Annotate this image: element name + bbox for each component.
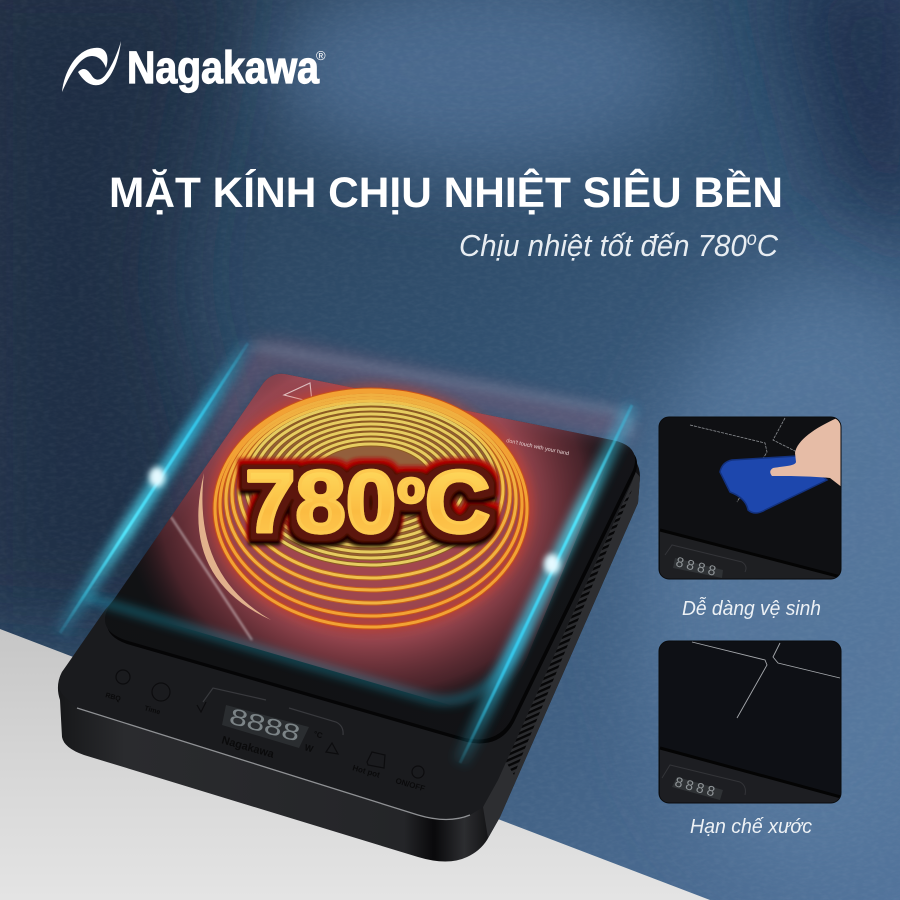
display outline: [662, 765, 745, 795]
button icons: [116, 670, 424, 778]
subtitle: Chịu nhiệt tốt đến 780: [459, 228, 762, 263]
button labels: RBQ: [104, 692, 122, 703]
button labels: Nagakawa: [220, 734, 276, 761]
heat haze frame above glass: [150, 338, 634, 545]
crescent light arc: [198, 473, 271, 620]
panel: scratch resistance photo: [659, 641, 841, 805]
panel outline: [203, 688, 343, 735]
caption: easy cleaning: Dễ dàng vệ sinh: [682, 597, 821, 620]
induction cooker: [58, 343, 640, 862]
side vent strip: [483, 470, 640, 838]
button labels: Hot pot: [351, 763, 381, 780]
caption: scratch resistance: Hạn chế xước: [690, 816, 812, 838]
badge: 780°C: o: [397, 464, 425, 512]
badge: 780°C: C: [425, 452, 490, 551]
cooker base and front/side faces: [58, 380, 640, 862]
warning icon on glass: [284, 383, 312, 402]
panel: easy cleaning photo: [659, 417, 843, 580]
coil shadows: [215, 390, 527, 627]
logo: Nagakawa: [62, 41, 326, 93]
heating coil rings: [215, 390, 527, 627]
display: [673, 558, 723, 578]
blue cloth: [720, 456, 827, 513]
digital display: [222, 703, 309, 748]
badge: 780°C: 780: [245, 452, 396, 551]
coil highlights: [215, 390, 527, 627]
halo frame around glass: [252, 346, 630, 436]
button labels: Time: [143, 705, 161, 716]
display outline: [665, 545, 746, 572]
display: [672, 777, 723, 800]
button labels: ON/OFF: [394, 776, 426, 793]
glass cooktop: [105, 374, 638, 744]
small caution text: don't touch with your hand: [506, 438, 569, 457]
title: MẶT KÍNH CHỊU NHIỆT SIÊU BỀN: [109, 168, 783, 217]
logo wordmark: Nagakawa: [127, 42, 320, 93]
button labels: W: [303, 742, 315, 754]
neon line left: [60, 343, 248, 633]
registered mark: ®: [316, 48, 326, 63]
digits: 8888: [674, 553, 721, 580]
subtitle: o: [747, 229, 757, 250]
hand: [770, 418, 843, 488]
coil inner fill: [246, 405, 496, 561]
digits: 8888: [673, 773, 720, 800]
subtitle: C: [757, 228, 779, 263]
digital display: 8888: [227, 703, 303, 746]
button labels: [104, 692, 426, 793]
coil red glow: [215, 390, 527, 626]
button labels: °C: [312, 729, 324, 740]
neon line right: [460, 405, 632, 763]
floor: light grey surface: [0, 629, 710, 900]
control panel: [104, 670, 426, 793]
logo swoosh icon: [62, 41, 121, 92]
top surface: [59, 380, 634, 820]
cyan glow along the lower edge: [85, 597, 526, 701]
